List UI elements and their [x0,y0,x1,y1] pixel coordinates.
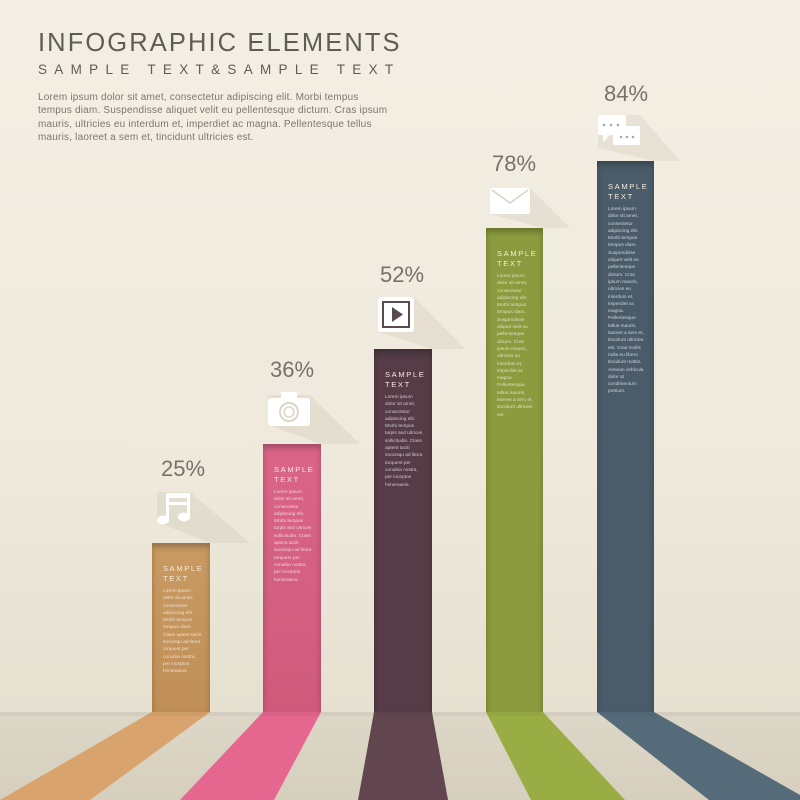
bar: 84% slate blue: SAMPLE [608,182,648,191]
icon: envelope [490,188,530,214]
bar: 25% orange: SAMPLE [163,564,203,573]
bar: 36% pink: TEXT [274,475,300,484]
bar: 36% pink: SAMPLE [274,465,314,474]
intro paragraph: Lorem ipsum dolor sit amet, consectetur adipiscing elit. Morbi tempus [38,92,359,103]
bar: 36% pink [263,444,321,712]
bar: 84% slate blue: Lorem ipsum dolor sit amet, consectetur adipiscing elit. Morbi tempus tempus diam. Suspendisse aliquet velit eu pellentesque dictum. Cras ipsum mauris, ultricies eu interdum et, imperdiet ac magna. Pellentesque tellus mauris, laoreet a sem et, tincidunt ultricies est. Cras mollis nulla eu libero tincidunt mattis. Aenean vehicula dolor at condimentum pretium. [608,207,644,394]
icon: camera [268,392,310,426]
icon: chat bubbles [598,115,640,145]
title: INFOGRAPHIC ELEMENTS [38,29,402,57]
bar: 78% green: Lorem ipsum dolor sit amet, consectetur adipiscing elit. Morbi tempus tempus diam. Suspendisse aliquet velit eu pellentesque dictum. Cras ipsum mauris, ultricies eu interdum et, imperdiet ac magna. Pellentesque tellus mauris, laoreet a sem et, tincidunt ultricies est. [497,274,533,418]
label: 84%: 84% [604,81,648,106]
icon: music note [157,493,190,524]
bar: 25% orange: Lorem ipsum dolor sit amet, consectetur adipiscing elit. Morbi tempus tempus diam. Class aptent taciti sociosqu ad litora torquent per conubia nostra, per inceptos himenaeos. [163,589,201,674]
bar: 84% slate blue [597,161,654,712]
bar: 78% green: TEXT [497,259,523,268]
label: 36%: 36% [270,357,314,382]
bar: 36% pink: Lorem ipsum dolor sit amet, consectetur adipiscing elit. Morbi tempus turpis sed ultrices sollicitudin. Class aptent taciti sociosqu ad litora torquent per conubia nostra, per inceptos himenaeos. [274,490,311,583]
icon: play [378,297,414,332]
intro paragraph [38,92,387,143]
bar: 84% slate blue: TEXT [608,192,634,201]
subtitle: SAMPLE TEXT&SAMPLE TEXT [38,62,400,77]
bar: 52% maroon: SAMPLE [385,370,425,379]
label: 78%: 78% [492,151,536,176]
bar: 52% maroon: Lorem ipsum dolor sit amet, consectetur adipiscing elit. Morbi tempus turpis sed ultrices sollicitudin. Class aptent taciti sociosqu ad litora torquent per conubia nostra, per inceptos himenaeos. [385,395,422,488]
bar: 78% green [486,228,543,712]
intro paragraph: tempus diam. Suspendisse aliquet velit eu pellentesque dictum. Cras ipsum [38,105,387,116]
label: 25%: 25% [161,456,205,481]
bar: 25% orange [152,543,210,712]
intro paragraph: mauris, ultricies eu interdum et, imperdiet ac magna. Pellentesque tellus [38,119,372,130]
bar: 25% orange: TEXT [163,574,189,583]
bar: 52% maroon: TEXT [385,380,411,389]
bar: 78% green: SAMPLE [497,249,537,258]
intro paragraph: mauris, laoreet a sem et, tincidunt ultricies est. [38,132,254,143]
label: 52%: 52% [380,262,424,287]
bar: 52% maroon [374,349,432,712]
